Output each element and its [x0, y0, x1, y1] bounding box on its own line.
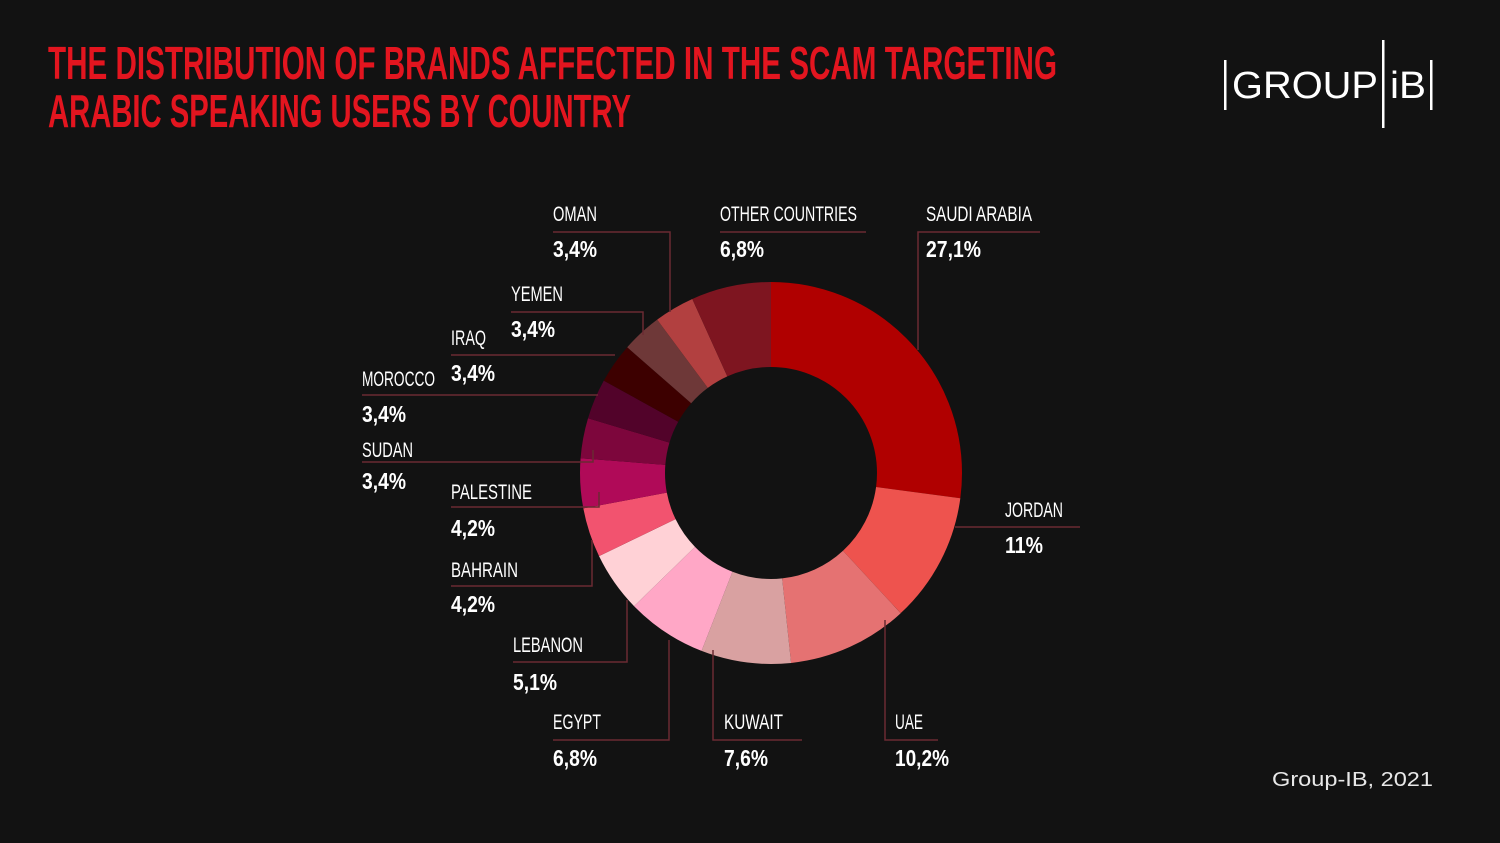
label: Yemen: 3,4%	[511, 316, 555, 342]
label: Oman	[553, 203, 597, 262]
label: Yemen	[511, 283, 563, 342]
label: Lebanon: 5,1%	[513, 669, 557, 695]
label: UAE: UAE	[895, 711, 923, 734]
label: Iraq: 3,4%	[451, 360, 495, 386]
label: Bahrain: 4,2%	[451, 591, 495, 617]
label: Kuwait: 7,6%	[724, 745, 768, 771]
label: Yemen: YEMEN	[511, 283, 563, 306]
label: Kuwait	[724, 711, 783, 771]
source credit: Group-IB, 2021	[1272, 769, 1433, 791]
label: Lebanon: LEBANON	[513, 634, 583, 657]
label: Jordan: 11%	[1005, 532, 1043, 558]
title	[48, 37, 1057, 137]
label: Saudi Arabia	[926, 203, 1032, 262]
logo: Group-IB	[1224, 40, 1432, 128]
label: Sudan: 3,4%	[362, 468, 406, 494]
label: Saudi Arabia: 27,1%	[926, 236, 981, 262]
label: Other countries: 6,8%	[720, 236, 764, 262]
logo: Group-IB: iB	[1390, 65, 1426, 107]
label: Jordan: JORDAN	[1005, 499, 1063, 522]
label: Sudan	[362, 439, 413, 494]
label: Morocco: MOROCCO	[362, 368, 435, 391]
label: Palestine: PALESTINE	[451, 481, 532, 504]
label: Saudi Arabia: SAUDI ARABIA	[926, 203, 1032, 226]
label: Morocco	[362, 368, 435, 427]
label: Bahrain	[451, 559, 518, 617]
label: Egypt: EGYPT	[553, 711, 601, 734]
label: Jordan	[1005, 499, 1063, 558]
label: Other countries: OTHER COUNTRIES	[720, 203, 857, 226]
label: Egypt	[553, 711, 601, 771]
logo: Group-IB: GROUP	[1232, 65, 1378, 107]
label: Kuwait: KUWAIT	[724, 711, 783, 734]
label: Bahrain: BAHRAIN	[451, 559, 518, 582]
label: Oman: OMAN	[553, 203, 597, 226]
label: Other countries	[720, 203, 857, 262]
label: UAE	[895, 711, 949, 771]
label: Oman: 3,4%	[553, 236, 597, 262]
label: Palestine: 4,2%	[451, 515, 495, 541]
donut chart	[622, 324, 920, 622]
title: ARABIC SPEAKING USERS BY COUNTRY	[48, 85, 631, 137]
label: Iraq	[451, 327, 495, 386]
label: Sudan: SUDAN	[362, 439, 413, 462]
label: Morocco: 3,4%	[362, 401, 406, 427]
label: Palestine	[451, 481, 532, 541]
leader lines	[362, 232, 1080, 740]
label: Egypt: 6,8%	[553, 745, 597, 771]
label: Lebanon	[513, 634, 583, 695]
label: UAE: 10,2%	[895, 745, 949, 771]
label: Iraq: IRAQ	[451, 327, 486, 350]
